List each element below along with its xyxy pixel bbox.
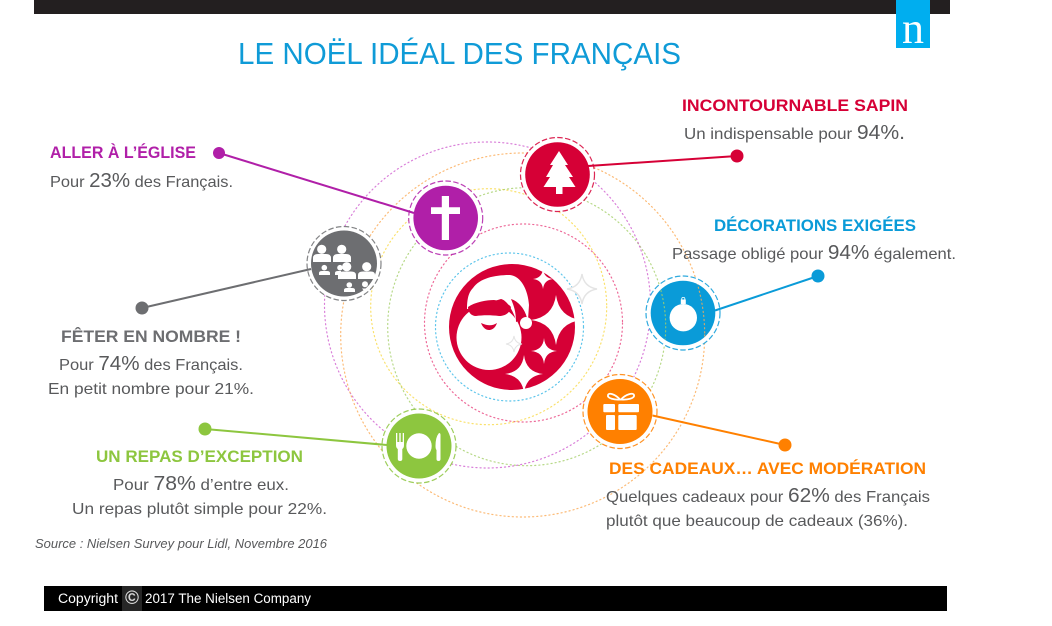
- panel: centre Santa medallion: [449, 264, 597, 393]
- logo: Nielsen n: n: [902, 4, 924, 53]
- orbit rings: [324, 142, 705, 517]
- heading: UN REPAS D’EXCEPTION: [96, 447, 303, 466]
- connector: blue line: [715, 270, 824, 310]
- panel: un repas d'exception: [72, 409, 456, 518]
- icon: cross: [409, 181, 483, 255]
- footer bar: [44, 586, 947, 611]
- text: 94% également: Passage obligé pour 94% également.: [672, 242, 956, 264]
- text: 23%: Pour 23% des Français.: [50, 170, 233, 192]
- text: 74%: Pour 74% des Français.: [59, 353, 243, 375]
- connector: purple line: [213, 147, 414, 213]
- icon: people: [307, 226, 381, 300]
- source note: Source : Nielsen Survey pour Lidl, Novembre 2016: [35, 537, 327, 551]
- copyright text: Copyright: [58, 591, 118, 606]
- icon: copyright symbol: ©: [125, 588, 139, 609]
- text: 36%: plutôt que beaucoup de cadeaux (36%).: [606, 513, 908, 530]
- connector: orange line: [652, 416, 792, 452]
- heading: INCONTOURNABLE SAPIN: [682, 96, 908, 115]
- icon: Santa face: [456, 275, 532, 370]
- icon: sparkles: [505, 269, 597, 393]
- text: 94%: Un indispensable pour 94%.: [684, 122, 905, 144]
- logo: Nielsen n: [896, 0, 930, 53]
- icon: plate and cutlery: [382, 409, 456, 483]
- icon: bauble: [645, 275, 721, 351]
- heading: DÉCORATIONS EXIGÉES: [714, 216, 916, 235]
- panel: des cadeaux: [583, 374, 930, 530]
- heading: FÊTER EN NOMBRE !: [61, 327, 241, 346]
- connector: red line: [588, 150, 744, 166]
- panel: décorations exigées: [645, 216, 954, 351]
- text: 78%: Pour 78% d’entre eux.: [113, 473, 289, 495]
- heading: DES CADEAUX… AVEC MODÉRATION: [609, 459, 926, 478]
- top bar: [34, 0, 950, 14]
- connector: grey line: [136, 269, 311, 314]
- panel: aller à l'église: [50, 143, 483, 255]
- title: LE NOËL IDÉAL DES FRANÇAIS: [238, 36, 681, 71]
- text: 22%: Un repas plutôt simple pour 22%.: [72, 501, 327, 518]
- panel: fêter en nombre: [48, 226, 381, 398]
- icon: Christmas tree: [520, 138, 594, 212]
- text: 62%: Quelques cadeaux pour 62% des Français: [606, 485, 930, 507]
- heading: ALLER À L’ÉGLISE: [50, 143, 196, 162]
- connector: green line: [198, 422, 387, 445]
- copyright year and company: 2017 The Nielsen Company: [145, 591, 311, 606]
- panel: incontournable sapin: [520, 96, 908, 212]
- text: 21%: En petit nombre pour 21%.: [48, 381, 254, 398]
- icon: gift: [583, 374, 657, 448]
